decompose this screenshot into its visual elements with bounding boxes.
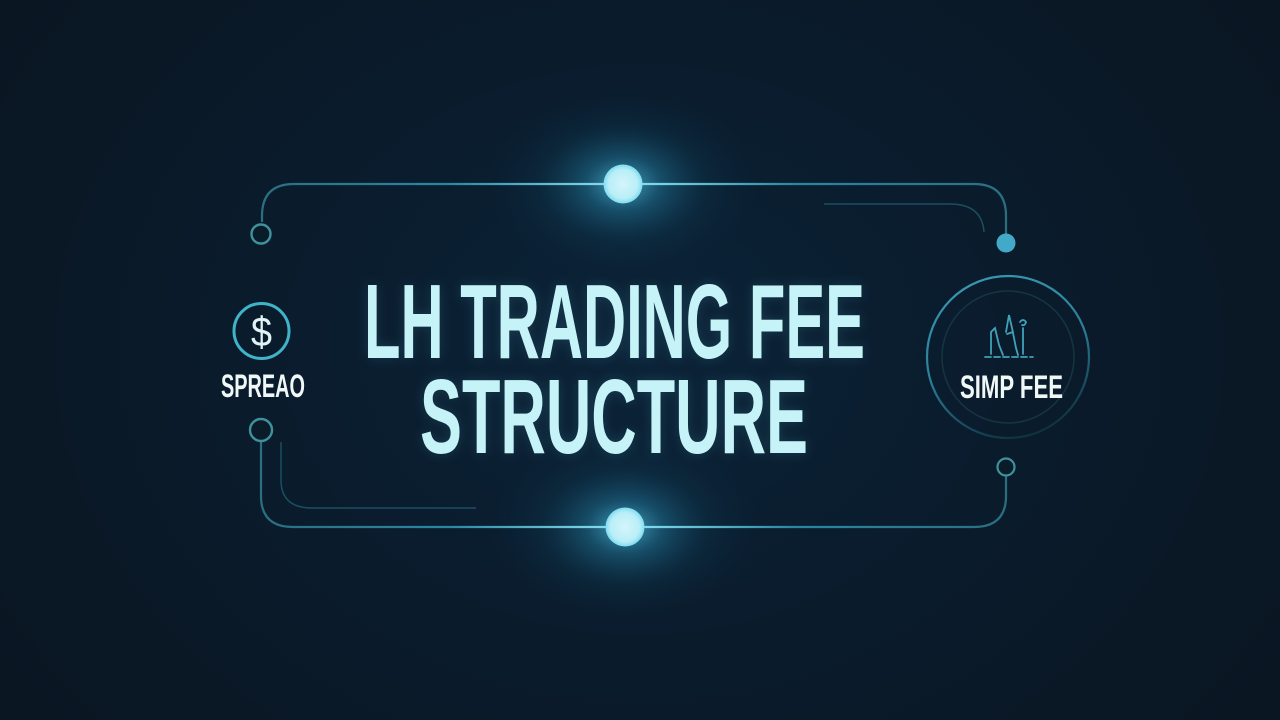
top glow bbox=[488, 89, 758, 279]
bottom node bbox=[606, 508, 644, 546]
bottom glow bbox=[490, 432, 760, 622]
bottom connector frame bbox=[261, 432, 1006, 622]
top node bbox=[604, 164, 642, 204]
connector end nodes bbox=[250, 224, 1016, 476]
title: LH TRADING FEE bbox=[364, 263, 865, 381]
title: LH TRADING FEE bbox=[364, 263, 865, 381]
label: spread: SPREAO bbox=[221, 368, 305, 404]
label: swap fee: SIMP FEE bbox=[960, 369, 1063, 405]
icon: dollar: $ bbox=[251, 308, 272, 355]
icon: chart figures bbox=[985, 315, 1033, 357]
title: STRUCTURE bbox=[420, 358, 808, 476]
title: STRUCTURE bbox=[420, 358, 808, 476]
top connector frame bbox=[262, 89, 1006, 279]
panel: spread bbox=[221, 304, 305, 404]
panel: swap fee bbox=[927, 276, 1089, 438]
outer rings bbox=[927, 276, 1089, 438]
title bbox=[364, 263, 865, 476]
